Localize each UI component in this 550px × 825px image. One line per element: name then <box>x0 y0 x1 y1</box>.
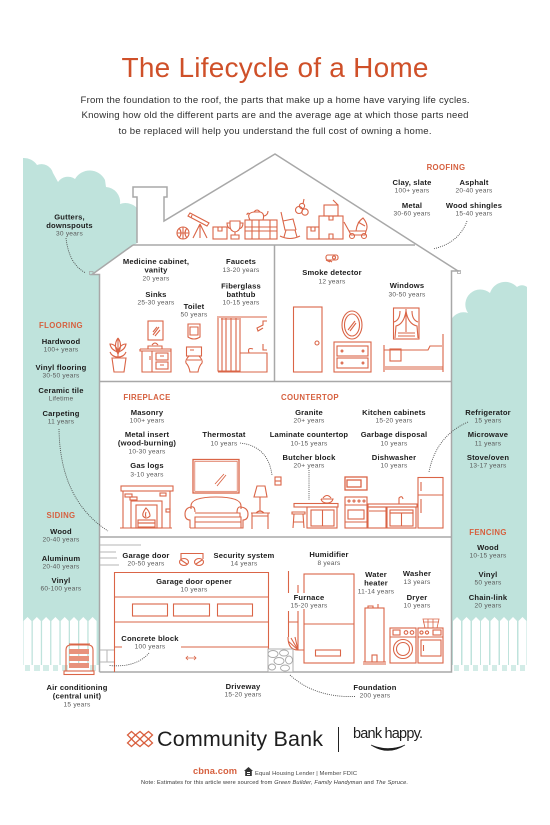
flooring section: 11 years <box>48 418 75 426</box>
icon: door handle <box>186 656 196 660</box>
icon: basketball <box>177 227 189 239</box>
utility room labels: Dryer <box>407 593 427 602</box>
bathroom labels: vanity <box>144 266 168 274</box>
fencing section: Wood <box>477 543 499 552</box>
kitchen icons <box>292 477 443 528</box>
label: thermostat: 10 years <box>211 440 238 448</box>
icon: equal housing <box>244 767 253 776</box>
icon: bathroom mirror <box>148 321 163 340</box>
icon: water heater <box>363 604 386 664</box>
bedroom labels: Windows <box>390 281 424 290</box>
kitchen labels: 10 years <box>381 440 408 448</box>
dotted leader: thermostat <box>240 443 272 475</box>
kitchen labels: Garbage disposal <box>361 430 427 439</box>
garage door <box>114 572 268 672</box>
icon: fireplace <box>120 486 173 528</box>
icon: baby stroller <box>344 218 367 238</box>
siding section <box>41 511 82 592</box>
siding section: Vinyl <box>52 576 70 585</box>
bedroom labels: 12 years <box>319 278 346 286</box>
fireplace section: FIREPLACE <box>123 393 171 402</box>
icon: door <box>294 307 322 372</box>
bathroom labels: Medicine cabinet, <box>123 257 189 266</box>
utility room labels: 13 years <box>404 579 431 586</box>
icon: vanity <box>140 343 171 372</box>
logo divider <box>338 727 340 752</box>
icon: potted plant <box>110 338 126 372</box>
dotted leader: refrigerator <box>429 422 468 472</box>
siding section: 20-40 years <box>42 536 80 544</box>
fencing section: 20 years <box>475 602 502 610</box>
roofing section: Clay, slate <box>393 178 431 187</box>
utility room labels: Water <box>365 570 387 579</box>
fireplace section: Gas logs <box>130 461 164 470</box>
utility room labels: 8 years <box>317 560 341 567</box>
utility room labels <box>290 550 431 610</box>
fireplace section: Metal insert <box>125 430 169 439</box>
dotted leader: gutters <box>66 238 85 272</box>
bathroom labels: 25-30 years <box>137 300 175 306</box>
appliance labels: Microwave <box>468 430 508 439</box>
icon: weave mark <box>128 732 152 746</box>
label: air conditioning: Air conditioning <box>46 683 108 692</box>
bedroom labels: 30-50 years <box>388 292 426 298</box>
icon: smoke detector <box>326 255 338 262</box>
roofing section <box>393 163 502 218</box>
bathroom labels: Fiberglass <box>221 282 261 290</box>
roofing section: 30-60 years <box>393 210 431 218</box>
icon: yarn ball <box>296 199 308 215</box>
bathroom labels: 20 years <box>143 276 170 282</box>
label: air conditioning <box>46 683 108 708</box>
fireplace section: Masonry <box>131 408 164 417</box>
icon: dresser <box>334 342 371 372</box>
roofing section: 100+ years <box>395 188 430 194</box>
icon: washer <box>390 628 416 663</box>
siding section: 20-40 years <box>42 564 80 570</box>
fencing section <box>469 528 508 610</box>
flooring section: Ceramic tile <box>38 386 84 395</box>
label: driveway: Driveway <box>226 682 261 691</box>
label: thermostat <box>202 430 246 448</box>
icon: island counter <box>294 504 338 528</box>
roofing section: ROOFING <box>427 163 465 172</box>
garage labels: Concrete block <box>121 634 179 643</box>
icon: bathtub and shower <box>217 317 267 372</box>
lender text: Equal Housing Lender | Member FDIC <box>255 771 357 777</box>
dotted leader: butcher block <box>308 470 310 500</box>
utility room labels: Humidifier <box>309 550 349 559</box>
label: driveway: 15-20 years <box>224 692 262 698</box>
bathroom labels: Sinks <box>145 290 167 299</box>
bathroom labels: 50 years <box>181 312 208 318</box>
siding section: SIDING <box>47 511 75 520</box>
bathroom labels <box>123 257 261 318</box>
countertop section: Butcher block <box>283 453 336 462</box>
gutter details <box>90 270 460 274</box>
icon: box <box>213 227 227 239</box>
bathroom labels: bathtub <box>226 290 256 299</box>
fencing section: FENCING <box>469 528 507 537</box>
flooring section: Carpeting <box>42 409 80 418</box>
countertop section <box>270 393 348 470</box>
utility room labels: heater <box>364 578 388 588</box>
label: gutters: Gutters, <box>54 212 85 222</box>
fencing section: Chain-link <box>469 593 508 602</box>
utility room labels: 11-14 years <box>358 588 395 596</box>
living room icons <box>120 460 270 529</box>
label: gutters: downspouts <box>46 221 93 230</box>
garage labels: 14 years <box>231 560 258 568</box>
icon: wall mirror <box>193 460 239 493</box>
label: air conditioning: (central unit) <box>53 692 102 700</box>
icon: oval mirror <box>342 311 362 339</box>
garage labels: Garage door <box>122 551 170 560</box>
bathroom labels: Toilet <box>184 302 205 311</box>
fireplace section: 3-10 years <box>130 472 164 478</box>
flooring section: Hardwood <box>42 337 80 346</box>
right fence <box>452 617 527 673</box>
label: foundation: 200 years <box>360 692 391 700</box>
label: air conditioning: 15 years <box>64 702 91 708</box>
icon: dryer with laundry basket <box>418 619 443 663</box>
utility room labels: 15-20 years <box>290 602 328 610</box>
kitchen labels: 15-20 years <box>375 418 413 424</box>
fencing section: Vinyl <box>479 570 497 579</box>
dotted leader: concrete block <box>109 653 149 666</box>
website: cbna.com <box>193 766 237 776</box>
bedroom icons <box>294 307 443 372</box>
attic icons <box>177 199 367 239</box>
utility room labels: Furnace <box>294 593 324 602</box>
kitchen labels: 10 years <box>381 462 408 470</box>
icon: stove <box>345 497 367 528</box>
icon: toilet <box>186 347 202 372</box>
flooring section: 30-50 years <box>42 372 80 380</box>
icon: curtained window <box>394 308 419 339</box>
roofing section: Wood shingles <box>446 201 502 210</box>
label: foundation: Foundation <box>353 683 397 692</box>
icon: sofa <box>185 497 248 528</box>
intro text <box>80 95 470 137</box>
icon: trunk with teapot <box>245 210 277 239</box>
icon: counter with dishwasher and sink <box>368 497 417 528</box>
kitchen labels: Dishwasher <box>372 453 416 462</box>
appliance labels: Refrigerator <box>465 408 511 417</box>
garage labels: Security system <box>214 551 275 560</box>
label: thermostat: Thermostat <box>202 430 246 439</box>
bathroom labels: Faucets <box>226 257 256 266</box>
fireplace section <box>118 393 176 478</box>
icon: trophy <box>227 221 243 239</box>
bedroom labels: Smoke detector <box>302 268 362 277</box>
label: gutters: 30 years <box>56 230 83 238</box>
fireplace section: 100+ years <box>130 418 165 424</box>
appliance labels <box>465 408 511 470</box>
fencing section: 10-15 years <box>469 552 507 560</box>
logo: Community Bank: Community Bank <box>157 727 323 751</box>
label: gutters <box>46 212 93 238</box>
bathroom icons <box>110 317 267 372</box>
label: driveway <box>224 682 262 698</box>
roofing section: 15-40 years <box>455 210 493 218</box>
fencing section: 50 years <box>475 580 502 586</box>
countertop section: 20+ years <box>294 462 325 470</box>
icon: stool <box>292 512 305 528</box>
roofing section: Asphalt <box>459 178 489 187</box>
fireplace section: 10-30 years <box>128 448 166 456</box>
source note: Note: Estimates for this article were sourced from Green Builder, Family Handyman and The Spruce. <box>141 780 408 786</box>
garage labels: Garage door opener <box>156 577 232 586</box>
title: The Lifecycle of a Home <box>122 52 428 83</box>
dotted leader: foundation <box>290 675 356 697</box>
countertop section: Granite <box>295 408 323 417</box>
icon: rocking chair <box>280 212 300 238</box>
icon: stacked boxes <box>307 200 343 239</box>
icon: lamp on side table <box>251 486 270 529</box>
garage labels <box>121 551 275 650</box>
label: foundation <box>353 683 397 700</box>
left green yard with trees <box>23 158 137 672</box>
countertop section: Laminate countertop <box>270 430 348 439</box>
kitchen labels: Kitchen cabinets <box>362 408 426 417</box>
utility room icons <box>288 571 443 664</box>
roofing section: 20-40 years <box>455 188 493 194</box>
roofing section: Metal <box>402 201 422 210</box>
icon: foundation stones <box>268 649 293 672</box>
logo: bank happy: bank happy. <box>353 726 423 742</box>
intro text: Knowing how old the different parts are and the average age at which those parts need <box>82 110 468 121</box>
icon: air conditioning unit <box>64 644 94 674</box>
siding section: Wood <box>50 527 72 536</box>
utility room labels: Washer <box>403 569 431 578</box>
thermostat icon <box>275 477 281 485</box>
garage labels: 100 years <box>135 644 166 650</box>
icon: telescope <box>188 213 209 238</box>
intro text: From the foundation to the roof, the parts that make up a home have varying life cycles. <box>80 95 470 106</box>
dotted leader: wood shingles <box>433 221 467 249</box>
icon: microwave <box>345 477 367 490</box>
flooring section: 100+ years <box>44 346 79 354</box>
icon: fruit bowl <box>321 496 333 503</box>
countertop section: COUNTERTOP <box>281 393 339 402</box>
logo: bank happy <box>353 726 423 750</box>
right green yard with trees <box>451 282 527 672</box>
kitchen labels <box>361 408 427 470</box>
garage labels: 20-50 years <box>127 560 165 568</box>
left fence <box>23 617 99 673</box>
bathroom labels: 13-20 years <box>222 267 260 274</box>
bedroom labels <box>302 268 426 298</box>
icon: refrigerator <box>418 478 443 528</box>
appliance labels: 13-17 years <box>469 462 507 470</box>
dotted leader: carpeting <box>59 429 108 531</box>
appliance labels: 11 years <box>475 440 502 448</box>
garage labels: 10 years <box>181 586 208 594</box>
appliance labels: 15 years <box>475 418 502 424</box>
utility room labels: 10 years <box>404 602 431 610</box>
flooring section: Vinyl flooring <box>36 363 87 372</box>
icon: security system <box>180 554 204 566</box>
countertop section: 20+ years <box>294 418 325 424</box>
house outline <box>92 154 458 672</box>
fireplace section: (wood-burning) <box>118 438 176 448</box>
icon: furnace <box>288 571 354 663</box>
icon: towel rack <box>188 324 200 339</box>
flooring section: Lifetime <box>49 396 73 402</box>
siding section: 60-100 years <box>41 586 82 592</box>
appliance labels: Stove/oven <box>467 453 509 462</box>
siding section: Aluminum <box>42 554 80 563</box>
bathroom labels: 10-15 years <box>222 300 260 306</box>
intro text: to be replaced will help you understand the full cost of owning a home. <box>118 126 432 137</box>
countertop section: 10-15 years <box>290 440 328 448</box>
flooring section <box>36 321 87 426</box>
flooring section: FLOORING <box>39 321 83 330</box>
icon: bed <box>384 334 443 372</box>
